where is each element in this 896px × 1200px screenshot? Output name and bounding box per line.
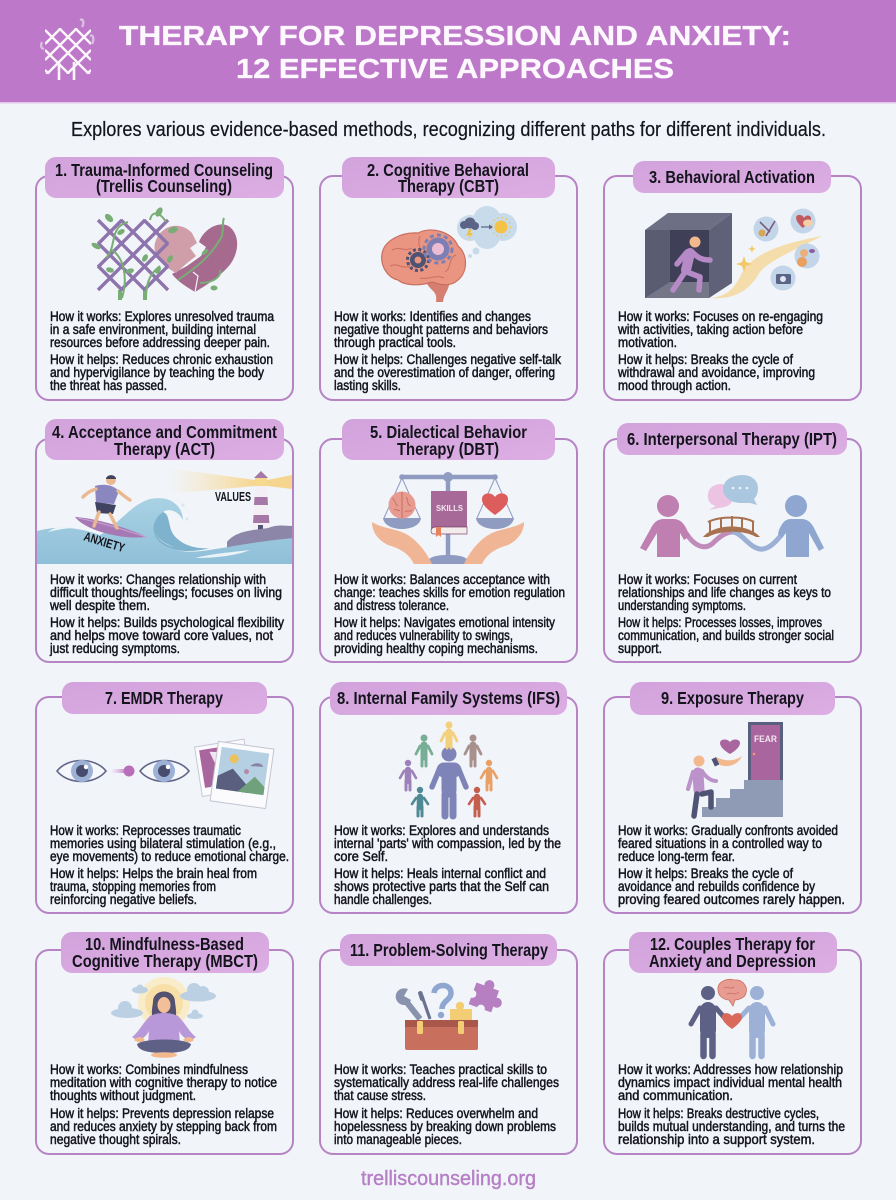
icon: brain with gears and thought cloud bbox=[382, 206, 517, 302]
text: how it works and helps: How it works: Teaches practical skills to bbox=[334, 1062, 547, 1077]
text: how it works and helps: reduce long-term fear. bbox=[618, 849, 735, 864]
text: how it works and helps: reinforcing negative beliefs. bbox=[50, 892, 197, 907]
text: how it works and helps: How it helps: Reduces chronic exhaustion bbox=[50, 352, 273, 367]
heading 5: 5. Dialectical Behavior bbox=[370, 422, 527, 442]
text: how it works and helps: thoughts without judgment. bbox=[50, 1088, 196, 1103]
text: how it works and helps: difficult thoughts/feelings; focuses on living bbox=[50, 585, 282, 600]
text: how it works and helps: motivation. bbox=[618, 335, 677, 350]
heading 10 bbox=[72, 934, 258, 971]
text: how it works and helps: negative thought spirals. bbox=[50, 1132, 181, 1147]
text: how it works and helps: resources before addressing deeper pain. bbox=[50, 335, 270, 350]
text: how it works and helps bbox=[618, 823, 845, 907]
heading 4: Therapy (ACT) bbox=[114, 439, 215, 459]
text: how it works and helps: How it helps: Prevents depression relapse bbox=[50, 1106, 274, 1121]
text: how it works and helps: core Self. bbox=[334, 849, 388, 864]
text: how it works and helps: and communication. bbox=[618, 1088, 733, 1103]
text: how it works and helps: shows protective parts that the Self can bbox=[334, 879, 549, 894]
heading 8: 8. Internal Family Systems (IFS) bbox=[337, 688, 560, 708]
text: how it works and helps: How it works: Gradually confronts avoided bbox=[618, 823, 838, 838]
header banner bbox=[0, 0, 896, 104]
text: how it works and helps bbox=[334, 1062, 559, 1147]
text: how it works and helps: How it works: Explores and understands bbox=[334, 823, 549, 838]
icon: person leaving dark box toward activities bbox=[645, 208, 822, 298]
text: how it works and helps: How it works: Reprocesses traumatic bbox=[50, 823, 241, 838]
heading 4: 4. Acceptance and Commitment bbox=[52, 422, 277, 442]
text: how it works and helps bbox=[49, 572, 284, 656]
text: how it works and helps: How it works: Explores unresolved trauma bbox=[50, 309, 274, 324]
text: how it works and helps bbox=[617, 309, 823, 393]
text: how it works and helps: support. bbox=[618, 641, 662, 656]
panel: 3 Behavioral Activation bbox=[604, 161, 861, 400]
icon: eyes with moving dot and photographs bbox=[57, 739, 274, 809]
text: how it works and helps: How it helps: Breaks destructive cycles, bbox=[618, 1106, 819, 1121]
title bbox=[119, 20, 791, 84]
text: how it works and helps: How it works: Identifies and changes bbox=[334, 309, 531, 324]
text: how it works and helps: eye movements) to reduce emotional charge. bbox=[50, 849, 289, 864]
text: how it works and helps: How it helps: Navigates emotional intensity bbox=[334, 615, 555, 630]
text: how it works and helps bbox=[50, 1062, 277, 1147]
panel: 10 Mindfulness-Based Cognitive Therapy bbox=[36, 932, 293, 1154]
text: how it works and helps: negative thought patterns and behaviors bbox=[334, 322, 548, 337]
text: how it works and helps: dynamics impact individual mental health bbox=[618, 1075, 842, 1090]
text: how it works and helps: builds mutual understanding, and turns the bbox=[618, 1119, 845, 1134]
text: how it works and helps bbox=[50, 823, 289, 907]
text: how it works and helps: How it works: Addresses how relationship bbox=[618, 1062, 843, 1077]
heading 2: 2. Cognitive Behavioral bbox=[367, 160, 529, 180]
heading 6: 6. Interpersonal Therapy (IPT) bbox=[627, 429, 837, 449]
panel: 5 Dialectical Behavior Therapy bbox=[320, 419, 577, 662]
label: anxiety: ANXIETY bbox=[82, 529, 127, 555]
text: how it works and helps bbox=[334, 309, 561, 393]
panel: 8 Internal Family Systems bbox=[320, 682, 577, 913]
heading 3: 3. Behavioral Activation bbox=[649, 167, 815, 187]
icon: surfer on anxiety wave with values lighthouse bbox=[37, 468, 293, 564]
icon: self surrounded by parts bbox=[400, 722, 497, 816]
text: how it works and helps: and reduces anxiety by stepping back from bbox=[50, 1119, 277, 1134]
text: how it works and helps: How it helps: Builds psychological flexibility bbox=[50, 615, 284, 630]
heading 12: Anxiety and Depression bbox=[649, 951, 816, 971]
text: how it works and helps: proving feared outcomes rarely happen. bbox=[618, 892, 845, 907]
panel: 12 Couples Therapy bbox=[604, 932, 861, 1154]
heading 4 bbox=[52, 422, 277, 459]
heading 5: Therapy (DBT) bbox=[397, 439, 499, 459]
text: how it works and helps: into manageable pieces. bbox=[334, 1132, 462, 1147]
heading 7: 7. EMDR Therapy bbox=[105, 688, 223, 708]
text: how it works and helps: How it helps: Heals internal conflict and bbox=[334, 866, 546, 881]
panel: 6 Interpersonal Therapy bbox=[604, 423, 861, 662]
subtitle: Explores various evidence-based methods, recognizing different paths for different individuals. bbox=[71, 119, 826, 141]
text: how it works and helps: systematically address real-life challenges bbox=[334, 1075, 559, 1090]
title: THERAPY FOR DEPRESSION AND ANXIETY: bbox=[119, 20, 791, 51]
text: how it works and helps: well despite them. bbox=[49, 598, 150, 613]
icon: trellis and broken heart bbox=[90, 206, 237, 300]
heading 1 bbox=[55, 160, 273, 196]
text: how it works and helps: change: teaches skills for emotion regulation bbox=[334, 585, 565, 600]
text: how it works and helps: How it works: Balances acceptance with bbox=[334, 572, 550, 587]
text: how it works and helps: How it helps: Reduces overwhelm and bbox=[334, 1106, 538, 1121]
label: values: VALUES bbox=[215, 489, 251, 504]
text: how it works and helps: How it helps: Breaks the cycle of bbox=[618, 352, 793, 367]
text: how it works and helps: just reducing symptoms. bbox=[49, 641, 180, 656]
text: how it works and helps: How it works: Focuses on current bbox=[618, 572, 797, 587]
text: how it works and helps: in a safe environment, building internal bbox=[50, 322, 256, 337]
panel: 9 Exposure Therapy bbox=[604, 682, 861, 913]
text: how it works and helps: with activities, taking action before bbox=[617, 322, 803, 337]
text: how it works and helps: How it helps: Breaks the cycle of bbox=[618, 866, 793, 881]
icon: trellis logo bbox=[41, 20, 93, 80]
text: how it works and helps: internal 'parts' with compassion, led by the bbox=[334, 836, 561, 851]
heading 10: 10. Mindfulness-Based bbox=[85, 934, 244, 954]
text: how it works and helps: How it helps: Helps the brain heal from bbox=[50, 866, 257, 881]
text: how it works and helps: feared situations in a controlled way to bbox=[618, 836, 822, 851]
heading 11: 11. Problem-Solving Therapy bbox=[350, 940, 548, 960]
text: how it works and helps: How it helps: Challenges negative self-talk bbox=[334, 352, 561, 367]
text: how it works and helps: How it works: Focuses on re-engaging bbox=[618, 309, 823, 324]
text: how it works and helps: mood through action. bbox=[618, 378, 731, 393]
text: how it works and helps bbox=[618, 572, 834, 656]
title: 12 EFFECTIVE APPROACHES bbox=[236, 53, 674, 84]
icon: balance scale with brain, skills book, heart, hands: SKILLS bbox=[436, 504, 464, 513]
heading 12: 12. Couples Therapy for bbox=[650, 934, 815, 954]
text: how it works and helps bbox=[618, 1062, 845, 1147]
text: how it works and helps: relationships and life changes as keys to bbox=[618, 585, 831, 600]
icon: two people linked by bridge with speech bubbles bbox=[640, 475, 824, 557]
text: how it works and helps: and the overestimation of danger, offering bbox=[334, 365, 555, 380]
text: how it works and helps: memories using bilateral stimulation (e.g., bbox=[50, 836, 276, 851]
heading 1: (Trellis Counseling) bbox=[96, 176, 232, 196]
text: how it works and helps: through practical tools. bbox=[334, 335, 456, 350]
text: how it works and helps: and reduces vulnerability to swings, bbox=[334, 628, 513, 643]
text: how it works and helps bbox=[334, 823, 561, 907]
icon: toolbox with tools and puzzle piece bbox=[396, 975, 508, 1050]
text: how it works and helps: providing healthy coping mechanisms. bbox=[334, 641, 538, 656]
heading 2 bbox=[367, 160, 529, 196]
text: how it works and helps: trauma, stopping memories from bbox=[50, 879, 216, 894]
text: how it works and helps: withdrawal and avoidance, improving bbox=[617, 365, 815, 380]
text: how it works and helps: How it works: Combines mindfulness bbox=[50, 1062, 248, 1077]
icon: person climbing stairs to fear door bbox=[688, 722, 783, 817]
heading 2: Therapy (CBT) bbox=[398, 176, 499, 196]
panel: 1 Trauma-Informed Counseling bbox=[36, 157, 293, 400]
text: how it works and helps: How it works: Changes relationship with bbox=[50, 572, 266, 587]
text: how it works and helps: understanding symptoms. bbox=[618, 598, 746, 613]
panel: 2 Cognitive Behavioral Therapy bbox=[320, 157, 577, 400]
text: how it works and helps: handle challenges. bbox=[334, 892, 432, 907]
text: how it works and helps: and hypervigilance by teaching the body bbox=[50, 365, 264, 380]
panel: 4 Acceptance and Commitment Therapy bbox=[36, 419, 293, 662]
text: how it works and helps: hopelessness by breaking down problems bbox=[334, 1119, 556, 1134]
text: how it works and helps bbox=[50, 309, 274, 393]
heading 10: Cognitive Therapy (MBCT) bbox=[72, 951, 258, 971]
text: how it works and helps: and distress tolerance. bbox=[334, 598, 449, 613]
icon: meditating person with halo and clouds bbox=[111, 977, 216, 1058]
text: how it works and helps bbox=[334, 572, 565, 656]
heading 1: 1. Trauma-Informed Counseling bbox=[55, 160, 273, 180]
icon: balance scale with brain, skills book, heart, hands bbox=[372, 472, 524, 564]
footer url: trelliscounseling.org bbox=[361, 1167, 536, 1190]
text: how it works and helps: that cause stress. bbox=[334, 1088, 426, 1103]
icon: couple holding heart under brain bbox=[691, 979, 773, 1056]
text: how it works and helps: lasting skills. bbox=[334, 378, 401, 393]
heading 5 bbox=[370, 422, 527, 459]
heading 9: 9. Exposure Therapy bbox=[661, 688, 804, 708]
text: how it works and helps: the threat has passed. bbox=[50, 378, 167, 393]
text: how it works and helps: and helps move toward core values, not bbox=[50, 628, 273, 643]
text: how it works and helps: How it helps: Processes losses, improves bbox=[618, 615, 822, 630]
panel: 7 EMDR Therapy bbox=[36, 682, 293, 913]
icon: person climbing stairs to fear door: FEAR bbox=[754, 734, 777, 745]
text: how it works and helps: avoidance and rebuilds confidence by bbox=[618, 879, 815, 894]
panel: 11 Problem-Solving Therapy bbox=[320, 934, 577, 1154]
text: how it works and helps: meditation with cognitive therapy to notice bbox=[50, 1075, 277, 1090]
heading 12 bbox=[649, 934, 816, 971]
text: how it works and helps: relationship into a support system. bbox=[618, 1132, 815, 1147]
text: how it works and helps: communication, and builds stronger social bbox=[618, 628, 834, 643]
